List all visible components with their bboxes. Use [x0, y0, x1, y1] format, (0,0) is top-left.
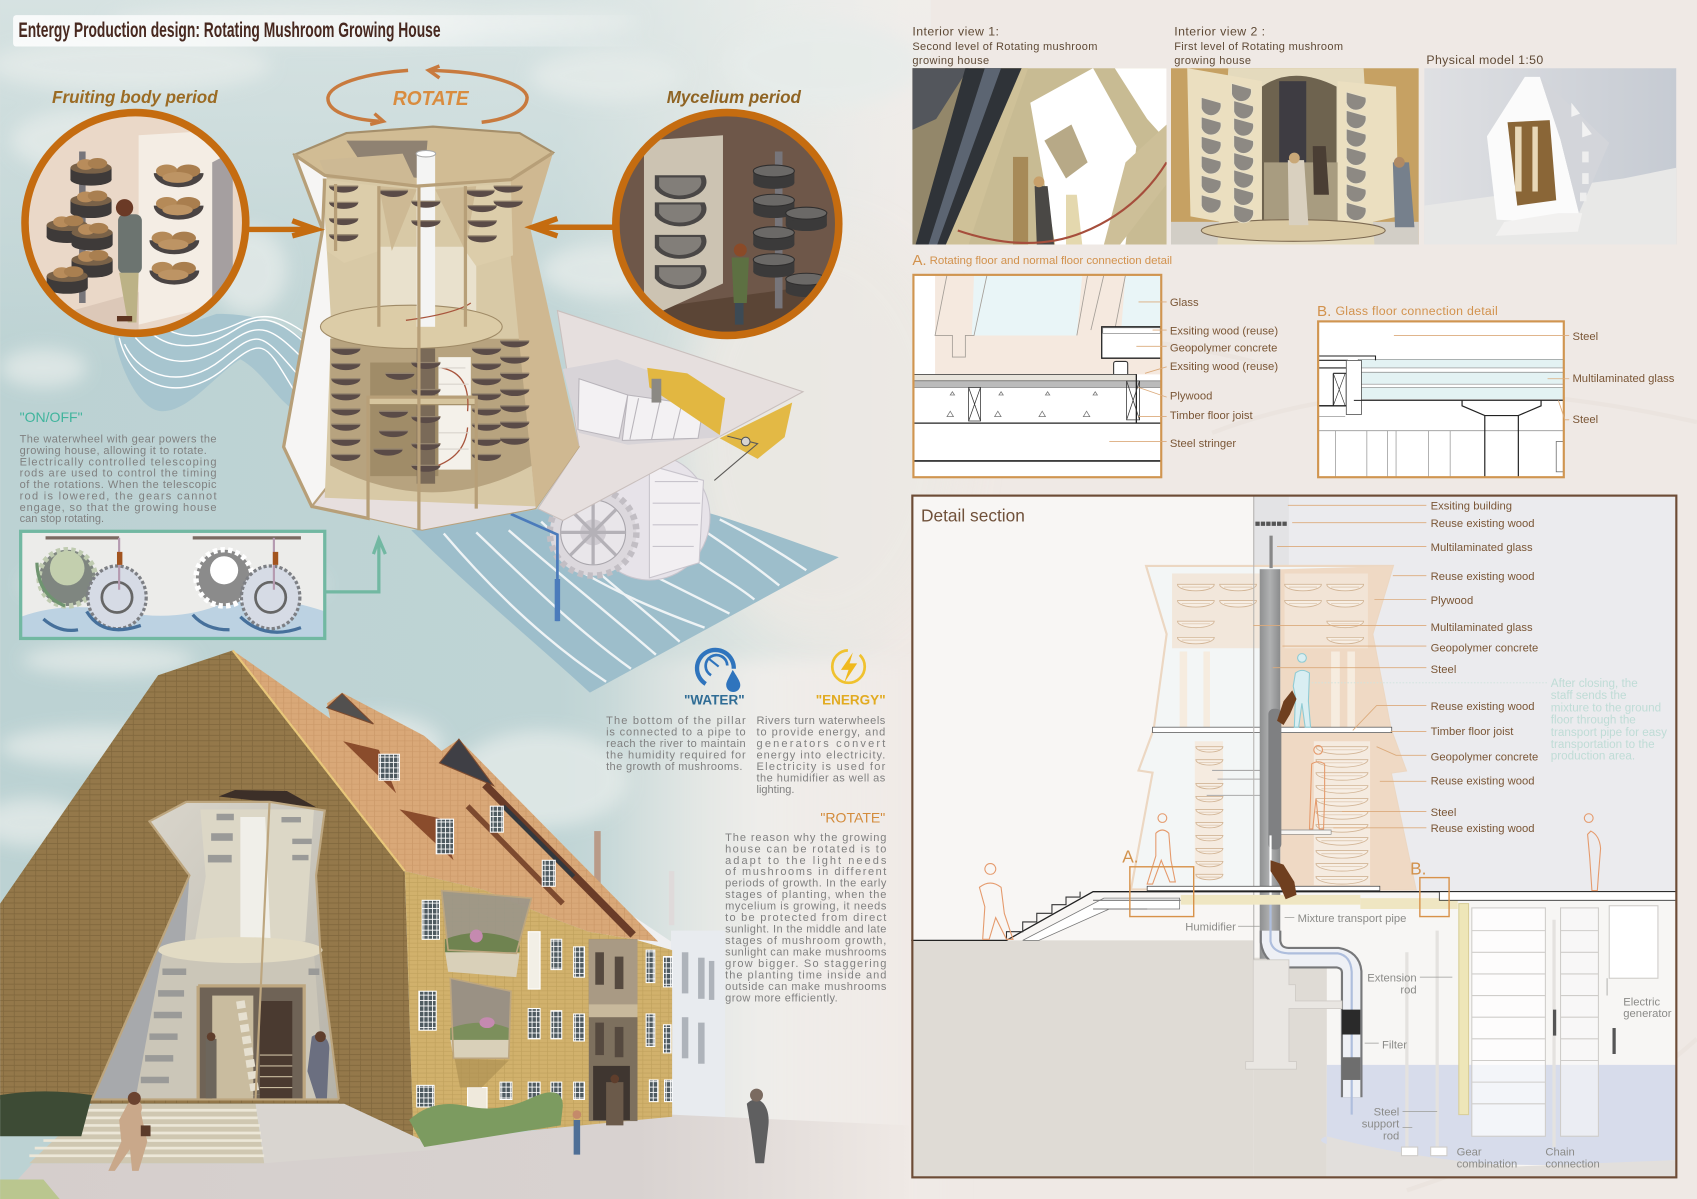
- text block: energy: lighting.: [757, 784, 794, 796]
- text block: on/off: rods are used to control the timing: [20, 468, 217, 480]
- heading: fruiting body period: Fruiting body period: [52, 87, 218, 107]
- labels: detail B: Steel: [1572, 331, 1598, 343]
- text block: on/off: can stop rotating.: [20, 513, 104, 525]
- section labels: materials: Timber floor joist: [1431, 726, 1514, 738]
- section labels: machinery: connection: [1545, 1159, 1600, 1171]
- section: orange callout boxes: [1130, 867, 1449, 917]
- icon: water gauge: [697, 650, 740, 692]
- building render: [0, 650, 909, 1199]
- text block: energy: to provide energy, and: [757, 726, 885, 738]
- photo: interior view 1: [912, 68, 1167, 245]
- text block: water: the growth of mushrooms.: [606, 761, 742, 773]
- section note: after closing: floor through the: [1551, 713, 1636, 726]
- callout label B: B.: [1410, 858, 1426, 878]
- text block: water: The bottom of the pillar: [606, 715, 746, 727]
- section note: after closing: transportation to the: [1551, 738, 1655, 751]
- section labels: machinery: Mixture transport pipe: [1298, 913, 1406, 925]
- rotate heading: "ROTATE": [820, 809, 885, 825]
- section: deck and stairs: [911, 886, 1676, 940]
- text block: on/off: [20, 409, 217, 525]
- heading: detail A: Rotating floor and normal floor connection detail: [930, 255, 1172, 267]
- section labels: materials: Geopolymer concrete: [1431, 642, 1538, 654]
- river stripes under the water wheel: [411, 509, 839, 693]
- windows: [417, 900, 672, 1120]
- section: water wheel and generator: [1401, 904, 1658, 1156]
- arrow: diagram to wheel: [325, 539, 385, 592]
- section labels: materials: Steel: [1431, 664, 1456, 676]
- panel: detail section: [911, 496, 1676, 1177]
- drawing: detail B: [1318, 321, 1564, 477]
- section note: after closing: [1312, 677, 1667, 763]
- arrow: fruiting to tower: [247, 221, 316, 236]
- labels: detail A: Timber floor joist: [1170, 410, 1253, 422]
- heading: detail A: [912, 252, 1172, 269]
- planting: [0, 1091, 563, 1147]
- river intake pipe: [511, 514, 557, 621]
- drawing: detail A: [913, 275, 1161, 477]
- photo: physical model: [1424, 68, 1676, 245]
- rotate label: ROTATE: [393, 88, 469, 110]
- text block: rotate: adapt to the light needs: [725, 855, 887, 867]
- icon: energy bolt: [832, 650, 865, 683]
- caption: interior view 1: Interior view 1:: [912, 25, 999, 39]
- heading: mycelium period: Mycelium period: [667, 87, 801, 107]
- labels: detail A: Exsiting wood (reuse): [1170, 361, 1278, 373]
- heading: detail B: B.: [1317, 303, 1331, 320]
- caption: physical model: Physical model 1:50: [1426, 53, 1543, 67]
- section note: after closing: mixture to the ground: [1551, 702, 1661, 715]
- section labels: materials: Plywood: [1431, 595, 1473, 607]
- section note: after closing: After closing, the: [1551, 677, 1638, 690]
- text block: on/off: "ON/OFF": [20, 409, 83, 425]
- labels: detail A: Geopolymer concrete: [1170, 343, 1277, 355]
- panel: gear on/off diagram: [21, 531, 325, 638]
- section: mushroom mixture: [1271, 690, 1297, 899]
- steps and ramp: [29, 1104, 442, 1163]
- section labels: machinery: rod: [1400, 984, 1417, 996]
- text block: rotate: to be protected from direct: [725, 912, 886, 924]
- text block: rotate: of mushrooms in different: [725, 866, 886, 878]
- text block: rotate: outside can make mushrooms: [725, 981, 887, 993]
- labels: detail A: Steel stringer: [1170, 438, 1236, 450]
- text block: on/off: The waterwheel with gear powers the: [20, 434, 217, 446]
- text block: rotate: the planting time inside and: [725, 969, 886, 981]
- water heading: "WATER": [684, 692, 745, 707]
- section labels: materials: Reuse existing wood: [1431, 518, 1534, 530]
- section labels: materials: Steel: [1431, 807, 1456, 819]
- water wheel with gear: [550, 454, 710, 580]
- text block: energy: Electricity is used for: [757, 761, 886, 773]
- section labels: materials: Reuse existing wood: [1431, 571, 1534, 583]
- text block: rotate: sunlight. In the middle and late: [725, 924, 886, 936]
- callout label A: A.: [1122, 846, 1139, 866]
- heading: detail A: A.: [912, 252, 927, 269]
- section labels: machinery: support: [1362, 1119, 1400, 1131]
- panel: mycelium circle: [612, 108, 844, 346]
- labels: detail B: Steel: [1572, 414, 1598, 426]
- heading: detail B: Glass floor connection detail: [1335, 304, 1498, 318]
- section labels: materials: Exsiting building: [1431, 501, 1512, 513]
- text block: energy: [757, 715, 886, 796]
- energy heading: "ENERGY": [816, 692, 886, 707]
- text block: energy: generators convert: [757, 738, 885, 750]
- text block: rotate: sunlight can make mushrooms: [725, 947, 887, 959]
- labels: detail B: Multilaminated glass: [1572, 373, 1675, 385]
- caption: interior view 2: [1174, 25, 1343, 67]
- section note: after closing: transport pipe for easy: [1551, 726, 1667, 739]
- text block: rotate: house can be rotated is to: [725, 843, 886, 855]
- balcony glass bays: [442, 891, 531, 1088]
- alley between buildings: [589, 939, 637, 1121]
- text block: water: the humidity required for: [606, 749, 746, 761]
- people: [108, 1031, 769, 1171]
- labels: detail A: [1109, 297, 1278, 450]
- section labels: machinery: generator: [1623, 1008, 1672, 1020]
- section labels: materials: Reuse existing wood: [1431, 701, 1534, 713]
- caption: interior view 1: growing house: [912, 55, 989, 67]
- text block: rotate: grow more efficiently.: [725, 992, 838, 1004]
- text block: on/off: of the rotations. When the telescopic: [20, 479, 217, 491]
- text block: on/off: Electrically controlled telescoping: [20, 456, 217, 468]
- text block: water: reach the river to maintain: [606, 738, 746, 750]
- text block: water: is connected to a pipe to: [606, 726, 746, 738]
- section labels: materials: Reuse existing wood: [1431, 776, 1534, 788]
- text block: rotate: periods of growth. In the early: [725, 878, 887, 890]
- detail section heading: Detail section: [921, 506, 1025, 526]
- text block: on/off: engage, so that the growing house: [20, 502, 217, 514]
- section labels: machinery: Filter: [1382, 1040, 1407, 1052]
- section labels: machinery: Chain: [1545, 1147, 1575, 1159]
- labels: detail B: [1394, 331, 1675, 426]
- text block: energy: Rivers turn waterwheels: [757, 715, 886, 727]
- icon: rotate arrows: [328, 66, 527, 124]
- section: blue figure: [1293, 654, 1311, 727]
- section labels: materials: Geopolymer concrete: [1431, 752, 1538, 764]
- caption: interior view 1: [912, 25, 1097, 67]
- text block: water: [606, 715, 746, 773]
- section labels: machinery: Electric: [1623, 996, 1661, 1008]
- section labels: machinery: [1185, 913, 1672, 1171]
- section: tower shell: [1131, 566, 1416, 890]
- text block: on/off: growing house, allowing it to rotate.: [20, 445, 207, 457]
- section labels: materials: [1253, 501, 1538, 835]
- text block: rotate: mycelium is growing, it needs: [725, 901, 887, 913]
- text block: on/off: rod is lowered, the gears cannot: [20, 490, 217, 502]
- river contour lines under left circle: [114, 314, 325, 412]
- section: foundation: [1246, 960, 1342, 1069]
- caption: interior view 2: First level of Rotating mushroom: [1174, 41, 1343, 53]
- text block: energy: energy into electricity.: [757, 749, 885, 761]
- labels: detail A: Exsiting wood (reuse): [1170, 325, 1278, 337]
- photo: interior view 2: [1171, 68, 1419, 245]
- text block: rotate: stages of mushroom growth,: [725, 935, 886, 947]
- text block: rotate: The reason why the growing: [725, 832, 886, 844]
- labels: detail A: Glass: [1170, 297, 1199, 309]
- text block: rotate: stages of planting, when the: [725, 889, 886, 901]
- platform with yellow generator box: [538, 311, 803, 521]
- text block: rotate: grow bigger. So staggering: [725, 958, 886, 970]
- section note: after closing: staff sends the: [1551, 689, 1627, 702]
- section labels: machinery: Extension: [1367, 972, 1417, 984]
- section labels: materials: Multilaminated glass: [1431, 542, 1533, 554]
- caption: interior view 2: growing house: [1174, 55, 1251, 67]
- tower glass front: [92, 790, 339, 1099]
- section: orange figures: [979, 746, 1601, 939]
- section: central pipe: [1253, 496, 1360, 1115]
- section labels: materials: Multilaminated glass: [1431, 622, 1533, 634]
- section labels: machinery: Steel: [1374, 1107, 1399, 1119]
- panel: fruiting body circle: [22, 108, 249, 346]
- text block: energy: the humidifier as well as: [757, 772, 886, 784]
- section labels: machinery: Gear: [1457, 1147, 1482, 1159]
- section labels: machinery: rod: [1383, 1130, 1399, 1142]
- caption: interior view 1: Second level of Rotating mushroom: [912, 41, 1097, 53]
- tower axonometric cutaway: [284, 127, 579, 530]
- section note: after closing: production area.: [1551, 750, 1635, 763]
- section labels: machinery: Humidifier: [1185, 922, 1236, 934]
- arrow: mycelium to tower: [533, 219, 615, 236]
- text block: rotate: [725, 832, 887, 1004]
- caption: interior view 2: Interior view 2 :: [1174, 25, 1265, 39]
- section labels: machinery: combination: [1457, 1159, 1517, 1171]
- title bar: Entergy Production design: Rotating Mushroom Growing House: [19, 17, 441, 42]
- section labels: materials: Reuse existing wood: [1431, 823, 1534, 835]
- labels: detail A: Plywood: [1170, 390, 1212, 402]
